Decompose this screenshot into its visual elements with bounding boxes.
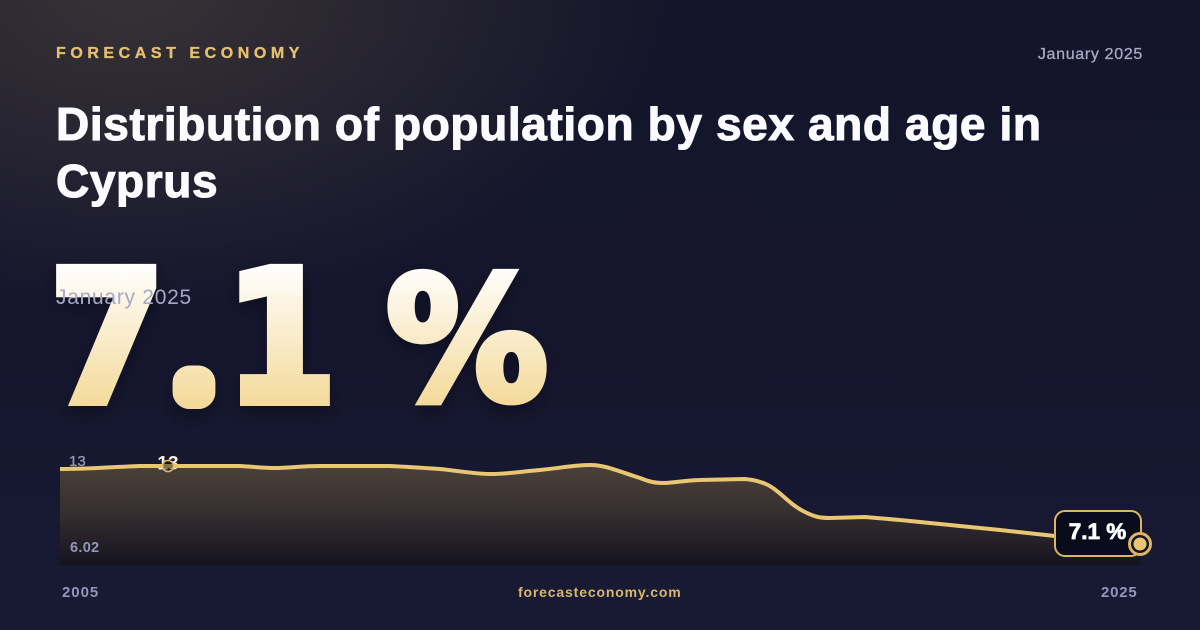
peak marker — [162, 460, 174, 472]
axis end year: 2025 — [1101, 584, 1138, 601]
big value: . — [184, 346, 204, 404]
value callout: 7.1 % — [1069, 519, 1126, 544]
date overlay: January 2025 — [56, 286, 192, 309]
axis min label: 6.02 — [70, 540, 99, 556]
big value: 1 — [224, 232, 338, 446]
brand label: FORECAST ECONOMY — [56, 44, 304, 62]
end point marker — [1130, 534, 1150, 554]
peak label: 13 — [157, 454, 179, 474]
chart line — [60, 465, 1055, 536]
big value: 7 — [48, 232, 166, 446]
chart area — [60, 465, 1140, 565]
axis max label: 13 — [69, 453, 86, 470]
title: Distribution of population by sex and age in Cyprus — [56, 98, 1042, 207]
footer source: forecasteconomy.com — [518, 584, 682, 600]
value callout — [1055, 511, 1141, 556]
axis start year: 2005 — [62, 584, 99, 601]
date top right: January 2025 — [1038, 46, 1143, 63]
big value: % — [386, 242, 548, 440]
